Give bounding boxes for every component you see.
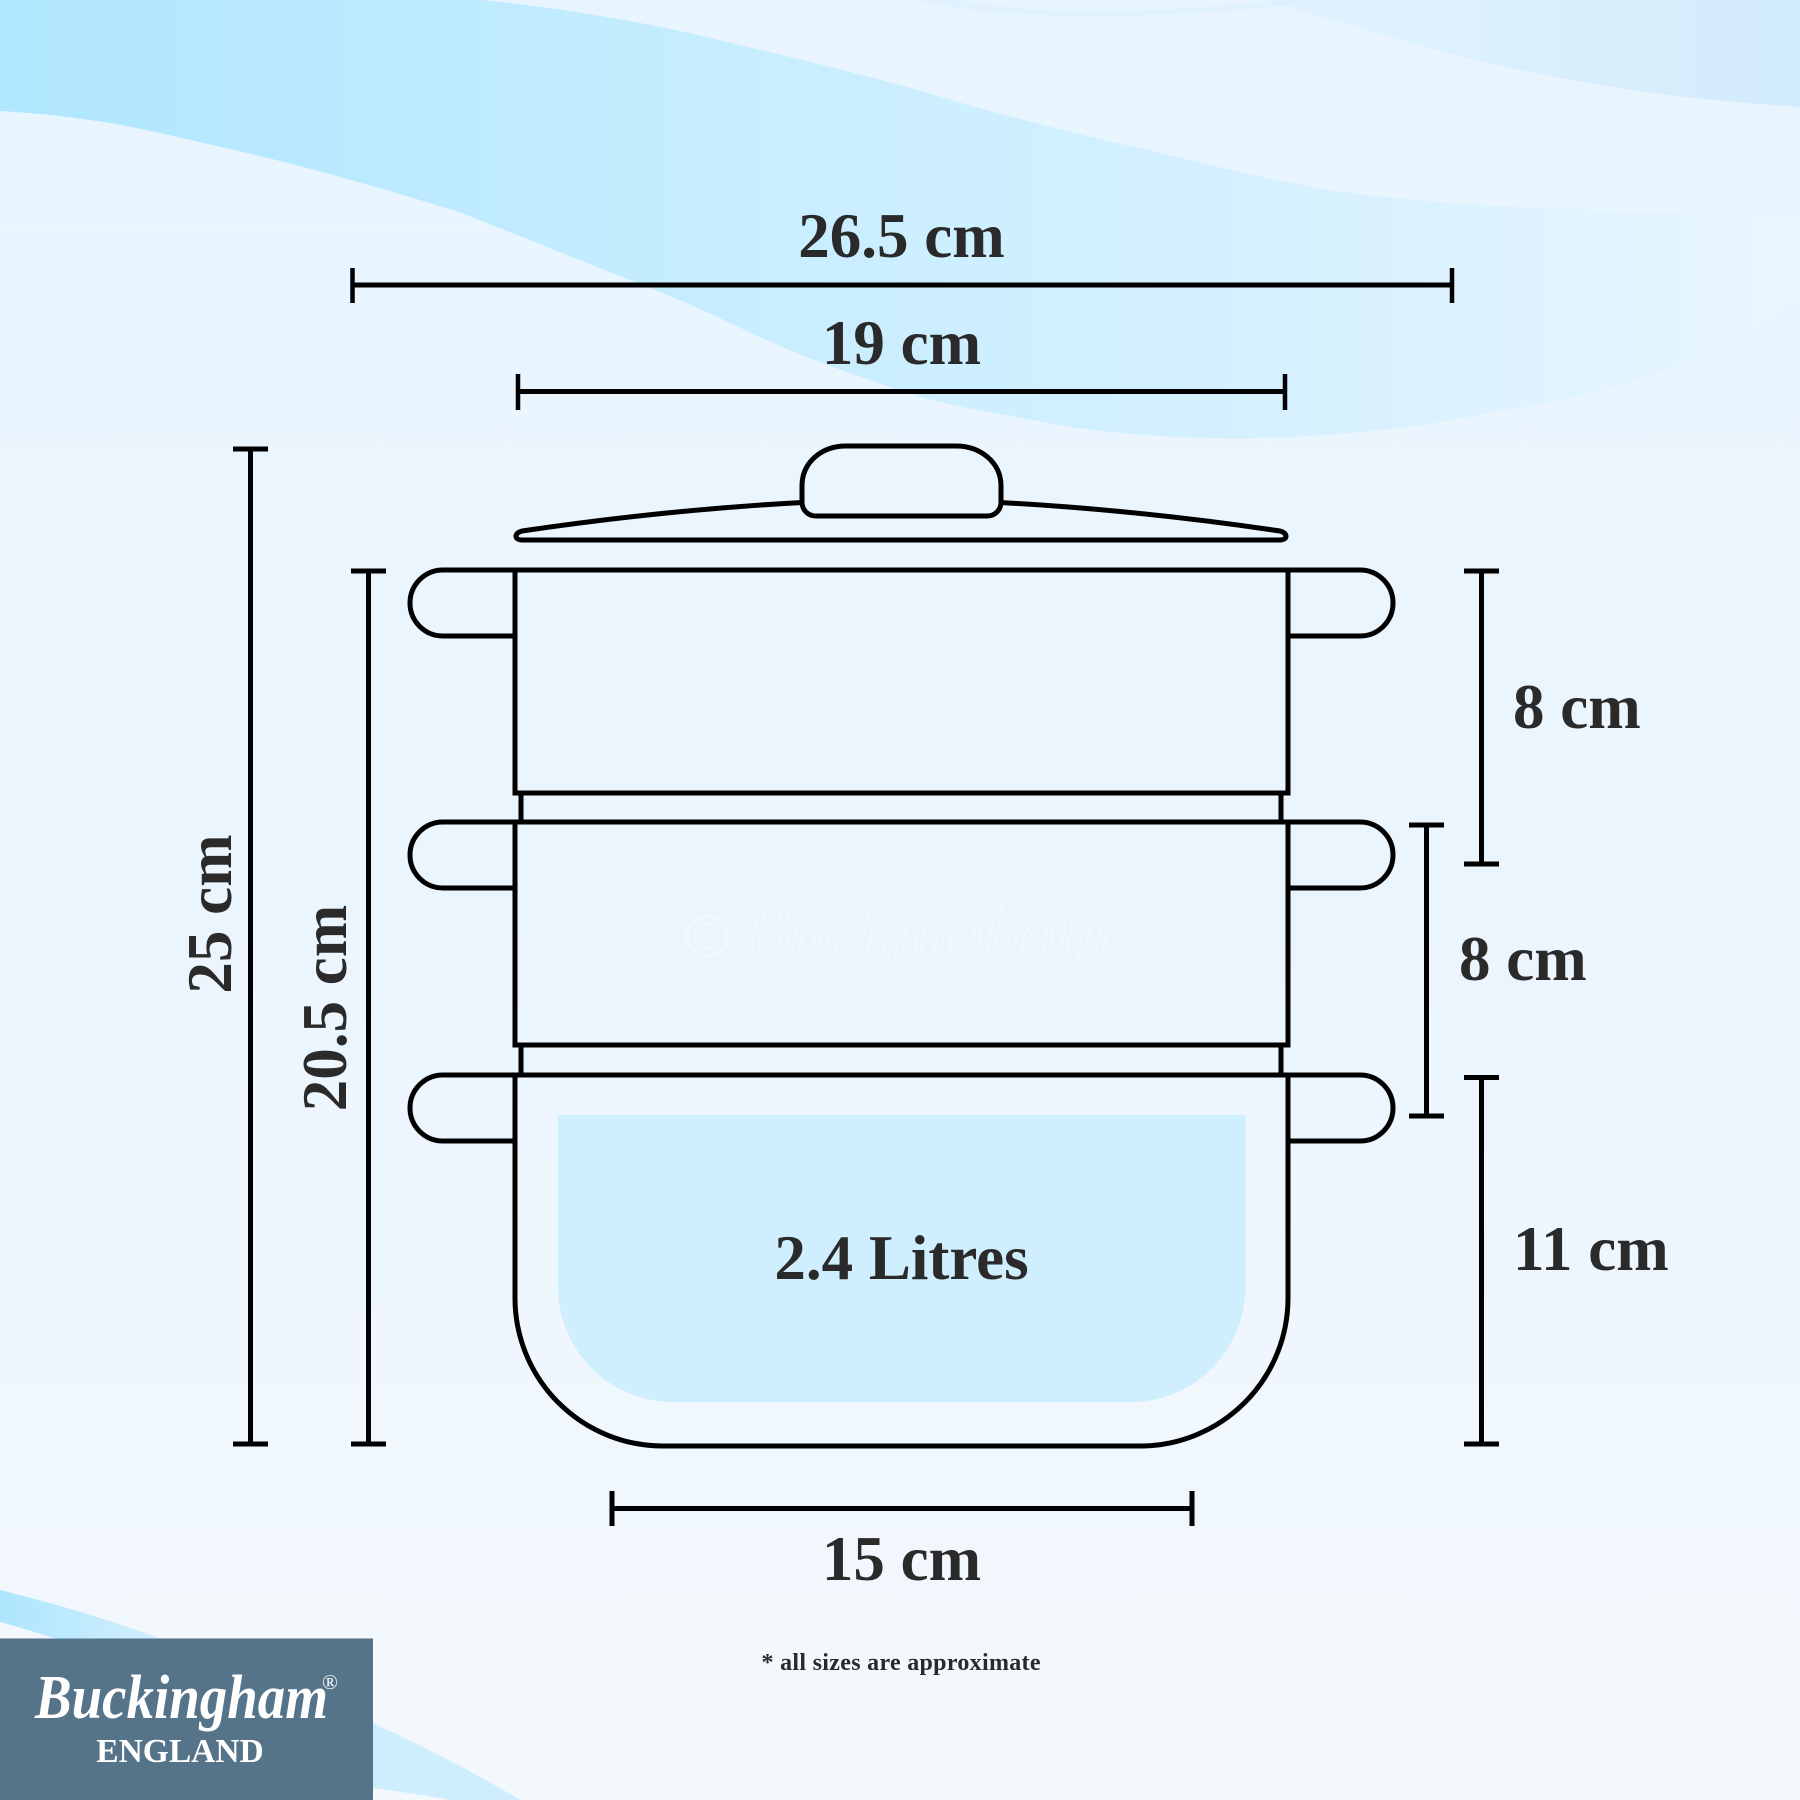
dimension: top pot 8 cm <box>1464 571 1641 864</box>
dimension: middle pot 8 cm <box>1409 825 1587 1116</box>
upper neck <box>521 793 1281 822</box>
dimension: bottom pot 11 cm <box>1464 1078 1669 1444</box>
dimension: overall width 26.5 cm: 26.5 cm <box>798 201 1005 271</box>
dimension: base width 15 cm <box>612 1491 1192 1594</box>
water fill: capacity <box>558 1115 1246 1402</box>
dimension: height without lid 20.5 cm: 20.5 cm <box>290 905 360 1111</box>
dimension: base width 15 cm: 15 cm <box>822 1524 981 1594</box>
logo wordmark: Buckingham <box>34 1664 328 1732</box>
middle pot <box>410 822 1393 1045</box>
watermark: Buckingham <box>745 890 1110 974</box>
lower neck <box>521 1045 1281 1075</box>
dimension: total height 25 cm <box>175 449 268 1444</box>
capacity label: 2.4 Litres <box>774 1223 1029 1293</box>
lid <box>516 446 1286 540</box>
logo panel <box>0 1638 373 1800</box>
top pot <box>410 570 1393 793</box>
dimension: bottom pot 11 cm: 11 cm <box>1513 1214 1669 1284</box>
dimension: rim width 19 cm: 19 cm <box>822 308 981 378</box>
logo subline: ENGLAND <box>96 1733 264 1770</box>
dimension: total height 25 cm: 25 cm <box>175 834 245 994</box>
dimension: overall width 26.5 cm <box>352 201 1452 303</box>
watermark: © <box>683 903 730 971</box>
dimension: rim width 19 cm <box>518 308 1285 410</box>
registered mark: ® <box>322 1670 338 1694</box>
dimension: height without lid 20.5 cm <box>290 571 386 1444</box>
dimension: top pot 8 cm: 8 cm <box>1513 672 1641 742</box>
footnote: * all sizes are approximate <box>762 1650 1041 1676</box>
bottom pot <box>410 1075 1393 1446</box>
steamer line drawing <box>410 446 1393 1446</box>
dimension: middle pot 8 cm: 8 cm <box>1459 924 1587 994</box>
